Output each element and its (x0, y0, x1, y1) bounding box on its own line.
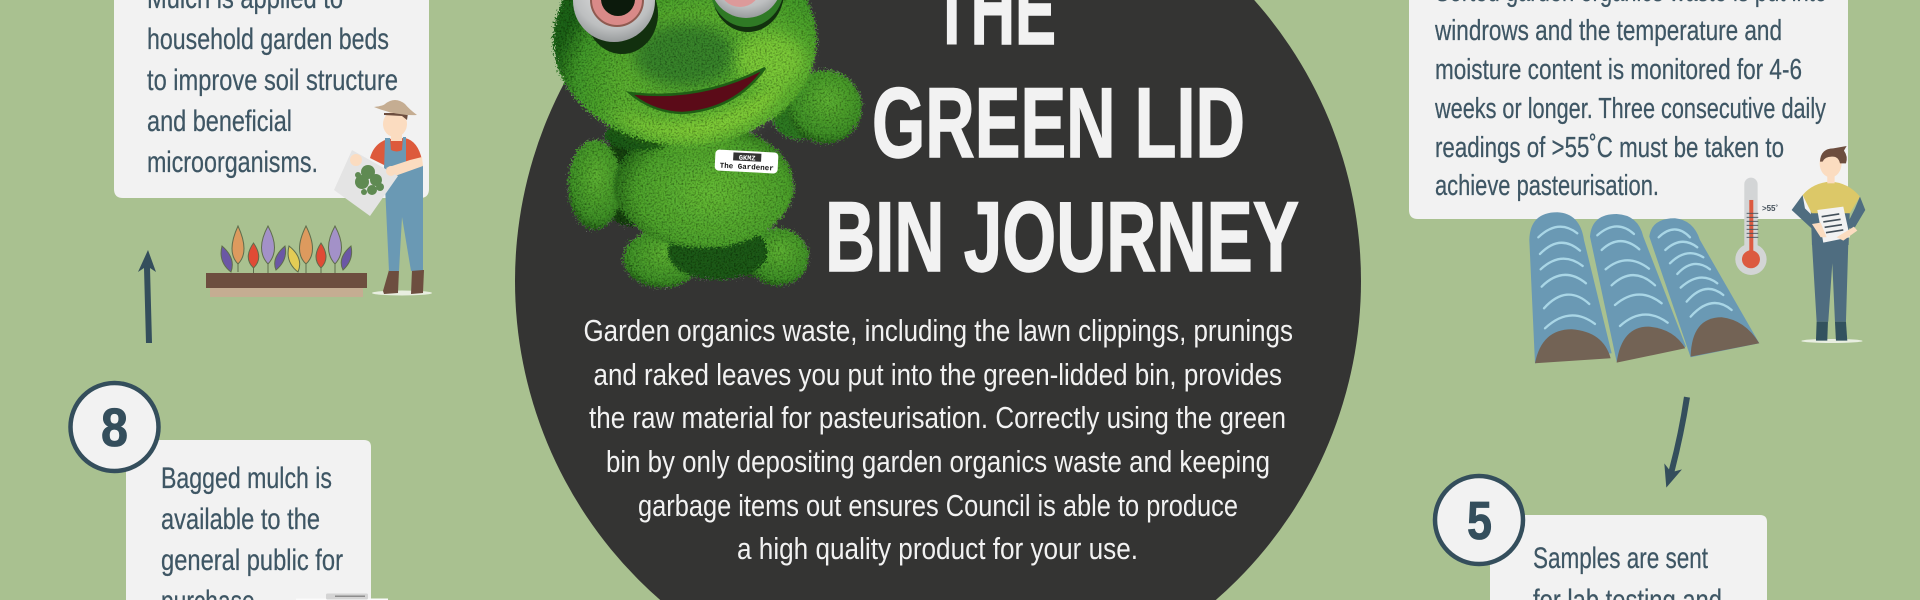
title: GREEN LID (872, 67, 1245, 178)
central dark circle panel (515, 0, 1361, 600)
panel: step 4 windrows monitoring: windrows and the temperature and (1434, 15, 1782, 47)
arrow: step 8 to step 9 (138, 250, 156, 343)
mascot: green furry gardener (553, 0, 862, 288)
step number 8 (70, 383, 158, 471)
name badge (715, 149, 779, 174)
arrow: step 4 to step 5 (1664, 397, 1690, 488)
step number 5 (1435, 476, 1523, 564)
mouth (630, 68, 765, 113)
step number 5: 5 (1467, 491, 1492, 551)
panel: step 9 mulch applied: and beneficial (147, 105, 292, 138)
intro paragraph: the raw material for pasteurisation. Correctly using the green (589, 400, 1286, 435)
name badge: GKMZ (739, 155, 756, 163)
intro paragraph: Garden organics waste, including the lawn clippings, prunings (584, 313, 1293, 348)
icon: thermometer (1735, 178, 1779, 275)
panel: step 4 windrows monitoring (1409, 0, 1848, 219)
left eye (573, 0, 658, 54)
panel: step 9 mulch applied: microorganisms. (147, 146, 318, 179)
intro paragraph (584, 313, 1293, 566)
panel: step 8 bagged mulch (126, 440, 371, 600)
panel: step 9 mulch applied (114, 0, 429, 198)
panel: step 9 mulch applied: household garden beds (147, 23, 389, 56)
panel: step 4 windrows monitoring: readings of >55˚C must be taken to (1435, 132, 1784, 164)
icon: farmer pouring mulch bag (334, 100, 432, 296)
panel: step 8 bagged mulch: available to the (161, 503, 320, 536)
name badge: The Gardener (720, 163, 774, 173)
intro paragraph: garbage items out ensures Council is able to produce (638, 488, 1238, 523)
panel: step 4 windrows monitoring: achieve pasteurisation. (1435, 170, 1659, 202)
icon: garden bed with plants (206, 226, 367, 297)
icon: thermometer: >55˚ (1762, 204, 1779, 213)
panel: step 4 windrows monitoring: moisture content is monitored for 4-6 (1435, 54, 1802, 86)
panel: step 9 mulch applied: to improve soil structure (147, 64, 398, 97)
intro paragraph: bin by only depositing garden organics waste and keeping (606, 444, 1270, 479)
panel: step 5 lab testing: Samples are sent (1533, 542, 1708, 575)
icon: man with clipboard (1792, 146, 1865, 343)
icon: top of mulch bags (296, 594, 388, 600)
right eye (710, 0, 784, 32)
icon: three covered windrows (1529, 212, 1759, 363)
title (825, 0, 1299, 292)
panel: step 8 bagged mulch: general public for (161, 544, 343, 577)
panel: step 5 lab testing (1490, 515, 1767, 600)
intro paragraph: and raked leaves you put into the green-lidded bin, provides (594, 357, 1282, 392)
title: BIN JOURNEY (825, 181, 1299, 292)
intro paragraph: a high quality product for your use. (737, 531, 1138, 566)
panel: step 8 bagged mulch: Bagged mulch is (161, 462, 332, 495)
step number 8: 8 (101, 398, 128, 458)
